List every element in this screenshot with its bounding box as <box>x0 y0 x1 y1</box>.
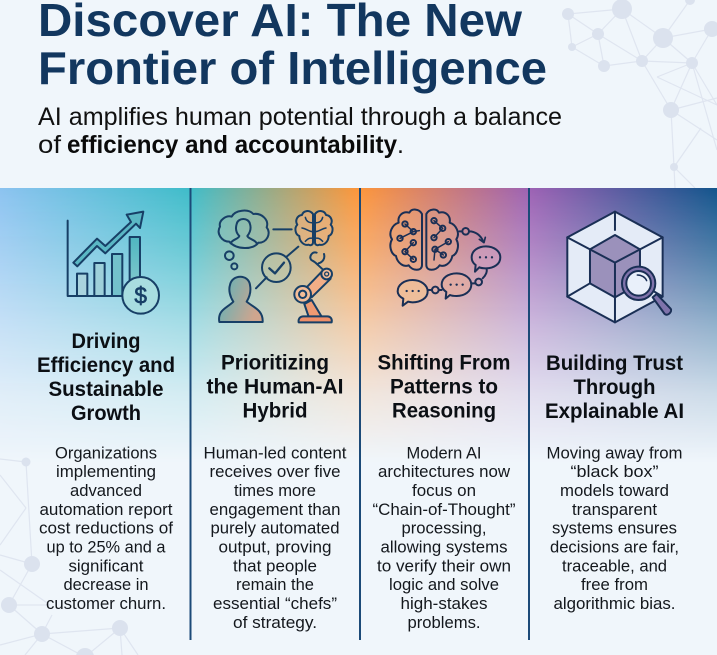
heading: Patterns to <box>390 374 498 398</box>
body text <box>39 444 173 613</box>
body text: output, proving <box>218 538 332 556</box>
panel: human-AI hybrid <box>204 211 347 632</box>
body text: decisions are fair, <box>550 538 679 556</box>
body text: engagement than <box>210 501 340 519</box>
icon: growth chart with dollar coin: $ <box>134 282 147 308</box>
icon: person, brain, check and robot arm <box>219 211 333 322</box>
decorative network: top right <box>562 0 717 188</box>
body text: essential “chefs” <box>213 595 337 613</box>
body text: Organizations <box>55 444 157 462</box>
subtitle: . <box>397 131 404 159</box>
heading <box>206 350 344 422</box>
title: Frontier of Intelligence <box>38 42 547 94</box>
body text: Moving away from <box>546 444 682 462</box>
body text: Human-led content <box>204 444 347 462</box>
body text: receives over five <box>210 463 340 481</box>
body text: remain the <box>236 576 314 594</box>
body text: “Chain-of-Thought” <box>372 501 516 519</box>
panel: driving efficiency <box>37 212 175 613</box>
icon: growth chart with dollar coin <box>68 212 159 314</box>
subtitle: of <box>38 131 61 159</box>
body text: significant <box>68 557 144 575</box>
body text <box>372 444 516 632</box>
heading: Growth <box>71 401 141 425</box>
heading: the Human-AI <box>206 374 344 398</box>
heading: Shifting From <box>378 350 510 374</box>
body text: “black box” <box>570 463 658 481</box>
heading <box>545 351 684 423</box>
body text: automation report <box>40 501 173 519</box>
body text: customer churn. <box>46 595 166 613</box>
body text: focus on <box>412 482 476 500</box>
body text: purely automated <box>210 520 340 538</box>
subtitle: efficiency and accountability <box>67 131 397 159</box>
body text: Modern AI <box>406 444 482 462</box>
body text <box>546 444 682 613</box>
panel: patterns to reasoning <box>372 210 516 632</box>
heading: Through <box>574 375 656 399</box>
body text: high-stakes <box>400 595 488 613</box>
body text: traceable, and <box>562 557 667 575</box>
heading: Hybrid <box>242 398 308 422</box>
body text <box>204 444 347 632</box>
body text: cost reductions of <box>39 520 173 538</box>
column dividers <box>190 188 529 640</box>
subtitle <box>38 103 562 159</box>
body text: problems. <box>408 614 480 632</box>
body text: implementing <box>56 463 156 481</box>
body text: systems ensures <box>552 520 677 538</box>
body text: algorithmic bias. <box>554 595 676 613</box>
decorative network: bottom left <box>0 458 138 655</box>
body text: to verify their own <box>377 557 511 575</box>
heading: Explainable AI <box>545 399 684 423</box>
body text: that people <box>233 557 317 575</box>
heading: Sustainable <box>48 377 164 401</box>
title <box>38 0 547 94</box>
icon: brain with chain of speech bubbles <box>390 210 500 306</box>
heading: Efficiency and <box>37 353 175 377</box>
heading <box>37 329 175 425</box>
body text: architectures now <box>378 463 510 481</box>
body text: logic and solve <box>389 576 499 594</box>
subtitle: AI amplifies human potential through a balance <box>38 103 562 131</box>
heading: Building Trust <box>546 351 683 375</box>
heading: Driving <box>72 329 140 353</box>
heading: Prioritizing <box>221 350 329 374</box>
body text: up to 25% and a <box>46 538 166 556</box>
body text: free from <box>581 576 648 594</box>
body text: transparent <box>572 501 657 519</box>
heading: Reasoning <box>392 398 496 422</box>
body text: decrease in <box>64 576 148 594</box>
icon: transparent hexagonal cube with magnifier <box>567 212 671 322</box>
body text: times more <box>234 482 316 500</box>
body text: of strategy. <box>233 614 317 632</box>
body text: advanced <box>70 482 142 500</box>
body text: allowing systems <box>380 538 508 556</box>
body text: processing, <box>402 520 486 538</box>
panel: explainable AI <box>545 212 684 613</box>
colour gradient band <box>0 188 717 463</box>
heading <box>378 350 510 422</box>
body text: models toward <box>560 482 669 500</box>
